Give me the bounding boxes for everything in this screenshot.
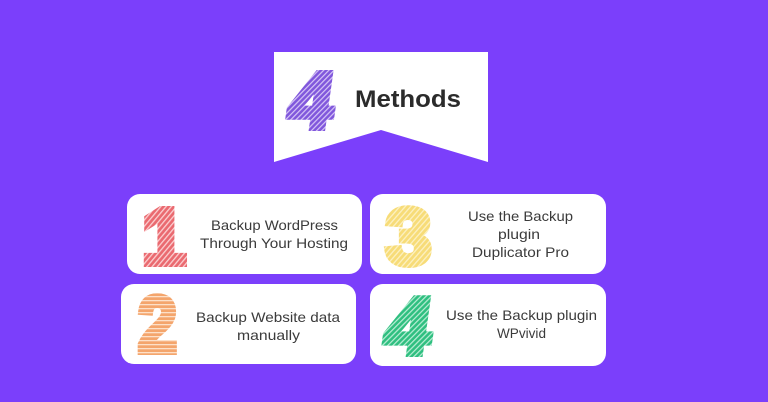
banner ribbon shape <box>274 52 488 162</box>
method 4 text <box>446 308 597 341</box>
method 2 text <box>196 310 340 343</box>
method 3 text <box>468 209 573 260</box>
banner <box>274 52 488 162</box>
method 3 text: Duplicator Pro <box>472 245 569 260</box>
panel: method 3 <box>370 192 606 282</box>
method 4 text: WPvivid <box>497 326 546 341</box>
card background <box>127 194 362 274</box>
card background <box>370 284 606 366</box>
panel: method 4 <box>370 282 606 372</box>
icon: yellow sketched number 3: 3 <box>385 192 432 282</box>
method 3 text: plugin <box>498 227 540 242</box>
card background <box>370 194 606 274</box>
icon: purple sketched number 4: 4 <box>283 56 341 146</box>
title: Methods <box>355 86 461 113</box>
method 3 text: Use the Backup <box>468 209 573 224</box>
icon: green sketched number 4: 4 <box>380 282 438 372</box>
panel: method 1 <box>127 192 362 281</box>
method 1 text: Through Your Hosting <box>200 236 348 251</box>
method 4 text: Use the Backup plugin <box>446 308 597 323</box>
icon: red sketched number 1: 1 <box>142 192 186 281</box>
method 2 text: manually <box>237 328 300 343</box>
icon: orange sketched number 2: 2 <box>138 280 177 369</box>
card background <box>121 284 356 364</box>
method 2 text: Backup Website data <box>196 310 340 325</box>
panel: method 2 <box>121 280 356 369</box>
method 1 text <box>200 218 348 251</box>
method 1 text: Backup WordPress <box>211 218 338 233</box>
